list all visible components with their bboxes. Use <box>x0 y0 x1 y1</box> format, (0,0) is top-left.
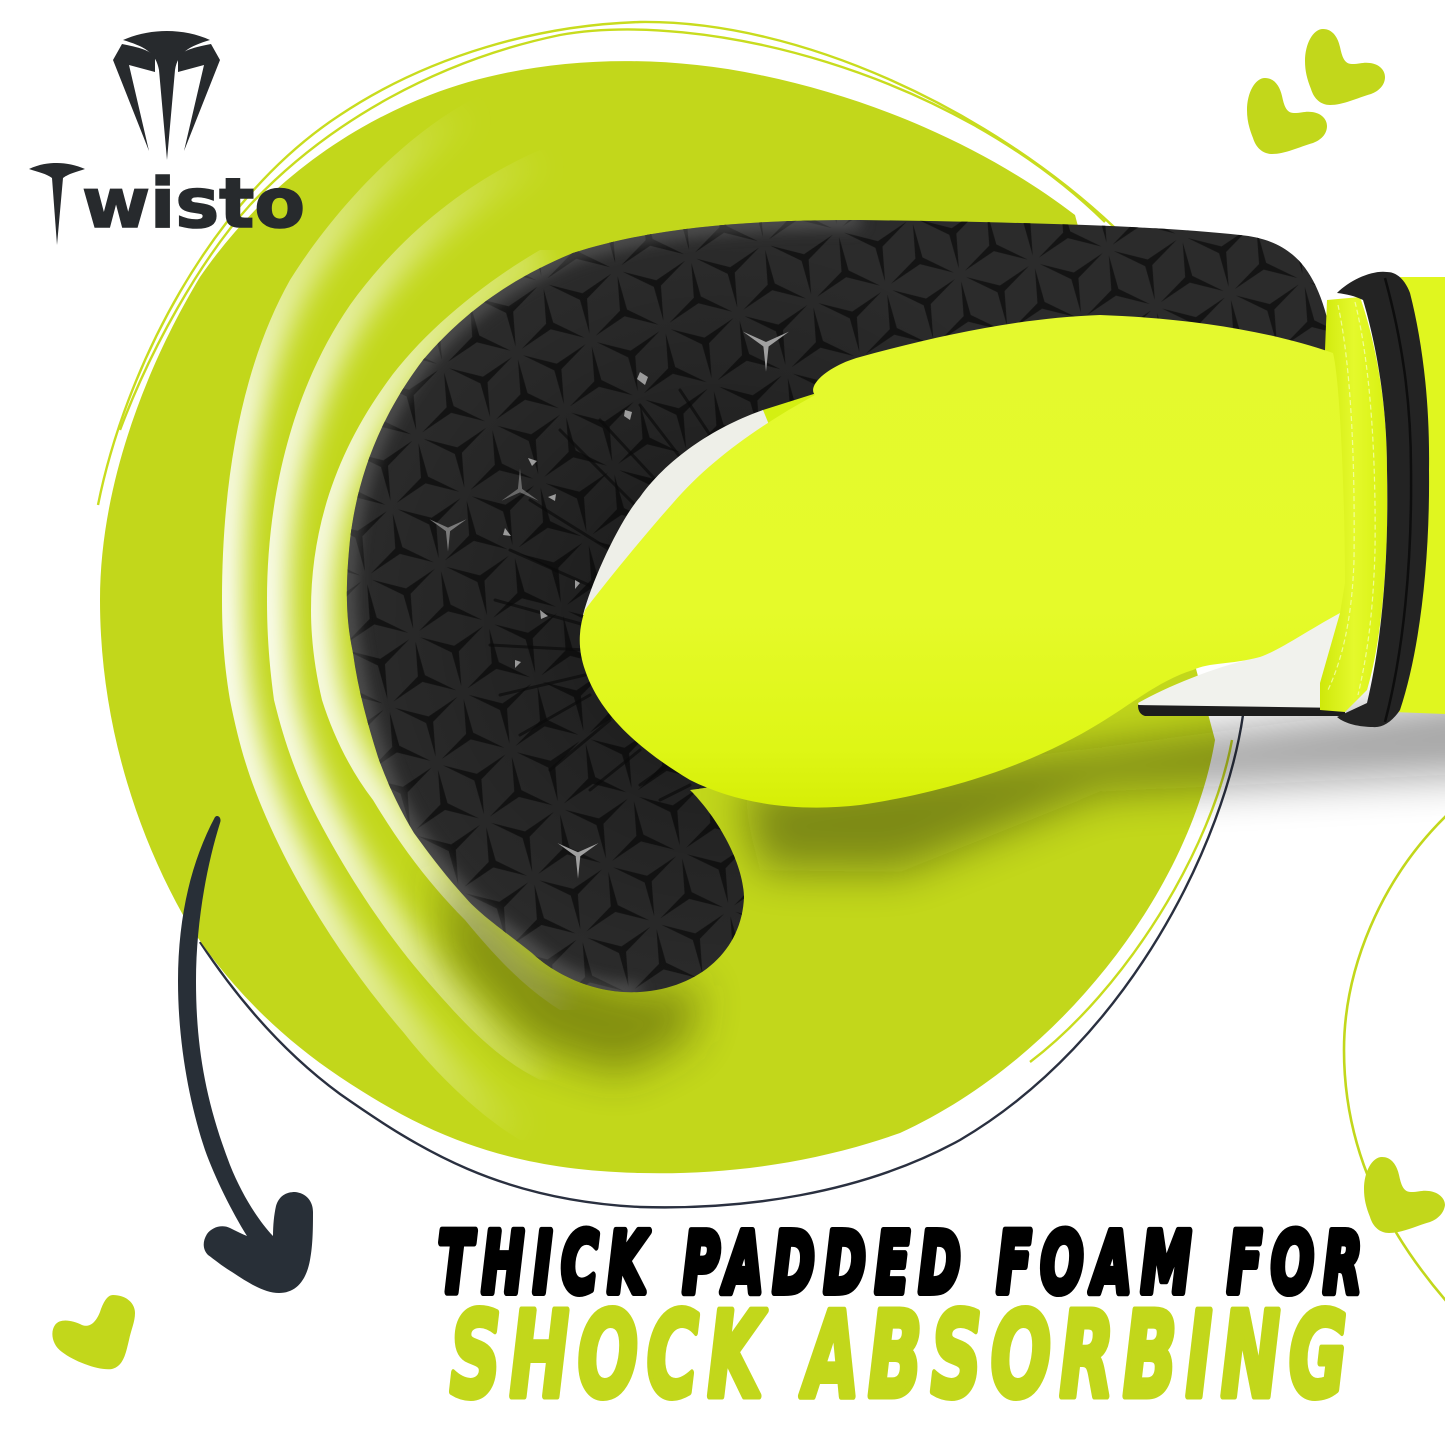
glove: black knuckle padding <box>340 210 1340 1010</box>
impact ripple rings <box>222 80 560 1140</box>
glove: small lime patch at seam <box>763 392 825 432</box>
logo: helmet emblem <box>113 31 220 160</box>
logo wordmark <box>29 163 303 245</box>
curved arrow pointing down <box>178 816 313 1293</box>
glove: wrist sleeve <box>1395 277 1445 714</box>
lime arc lower right <box>1030 740 1232 1062</box>
glove: white wrist panel <box>1138 610 1345 708</box>
glove: white inner seam <box>583 410 785 615</box>
logo letter T: T <box>20 137 94 271</box>
small hearts top right <box>1247 29 1385 154</box>
glove: wrist band stitching <box>1328 302 1375 695</box>
glove: lime thumb and palm <box>580 315 1345 808</box>
headline line 2: SHOCK ABSORBING <box>450 1287 1347 1424</box>
large outline circle right edge <box>1344 815 1445 1302</box>
headline line 1: THICK PADDED FOAM FOR <box>438 1216 1362 1313</box>
large lime circle <box>100 61 1215 1173</box>
glove: black base strip <box>1138 705 1345 716</box>
navy arc under the circle <box>200 715 1243 1207</box>
heart on right circle <box>1364 1157 1445 1233</box>
glove: black cuff binding <box>1337 272 1429 727</box>
logo letters wisto: wisto <box>82 164 305 244</box>
boxing glove <box>340 210 1445 1010</box>
glove drop shadow <box>440 695 1445 1075</box>
glove: cuff seam <box>1385 278 1411 722</box>
thin lime arcs above the circle <box>98 22 1115 505</box>
heart bottom left <box>52 1295 135 1369</box>
glove: lime wrist band <box>1320 297 1387 712</box>
